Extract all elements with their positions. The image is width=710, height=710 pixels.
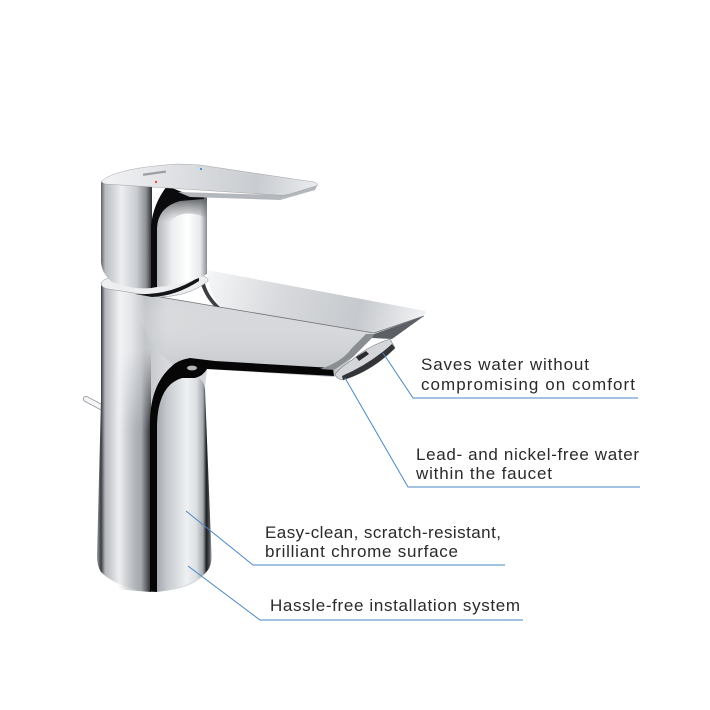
body right lower panel — [157, 378, 212, 592]
callout: lead- and nickel-free — [345, 378, 640, 487]
infographic: faucet with feature callouts — [83, 164, 640, 620]
callout: saves water: Saves water without — [421, 355, 589, 374]
lever lower lip — [178, 184, 318, 200]
aerator underside — [342, 344, 395, 380]
handle dark arch — [151, 186, 204, 288]
logo mark — [143, 170, 166, 176]
handle panel top shading — [157, 196, 207, 226]
handle light panel — [157, 196, 207, 287]
collar shadow — [135, 277, 199, 297]
arch highlight — [187, 366, 197, 370]
lip below tip — [372, 316, 424, 339]
callout: lead- and nickel-free: within the faucet — [415, 464, 552, 483]
callout: saves water — [383, 353, 638, 398]
aerator — [335, 339, 395, 380]
spout front shading — [135, 295, 374, 377]
callout: saves water: compromising on comfort — [421, 375, 635, 394]
collar — [101, 275, 208, 297]
hot indicator — [155, 181, 157, 183]
icon: faucet — [86, 164, 426, 592]
callout: installation: Hassle-free installation system — [270, 596, 520, 615]
body arch shadow — [150, 358, 334, 592]
body lower left shading — [118, 345, 151, 592]
lever top — [101, 164, 318, 195]
cold indicator — [200, 168, 202, 170]
callout: chrome surface — [186, 511, 505, 565]
plate left curve — [200, 280, 220, 307]
faucet body silhouette — [97, 285, 374, 592]
callout: lead- and nickel-free: Lead- and nickel-free water — [416, 445, 639, 464]
callout: chrome surface: Easy-clean, scratch-resistant, — [265, 523, 501, 542]
handle body — [101, 182, 152, 288]
callout: installation — [188, 566, 523, 620]
callout: chrome surface: brilliant chrome surface — [265, 542, 458, 561]
spout top plate — [207, 270, 426, 333]
aerator band — [356, 351, 369, 361]
nose shading — [320, 334, 374, 370]
drain pull rod — [86, 399, 101, 407]
plate seam — [160, 297, 424, 333]
